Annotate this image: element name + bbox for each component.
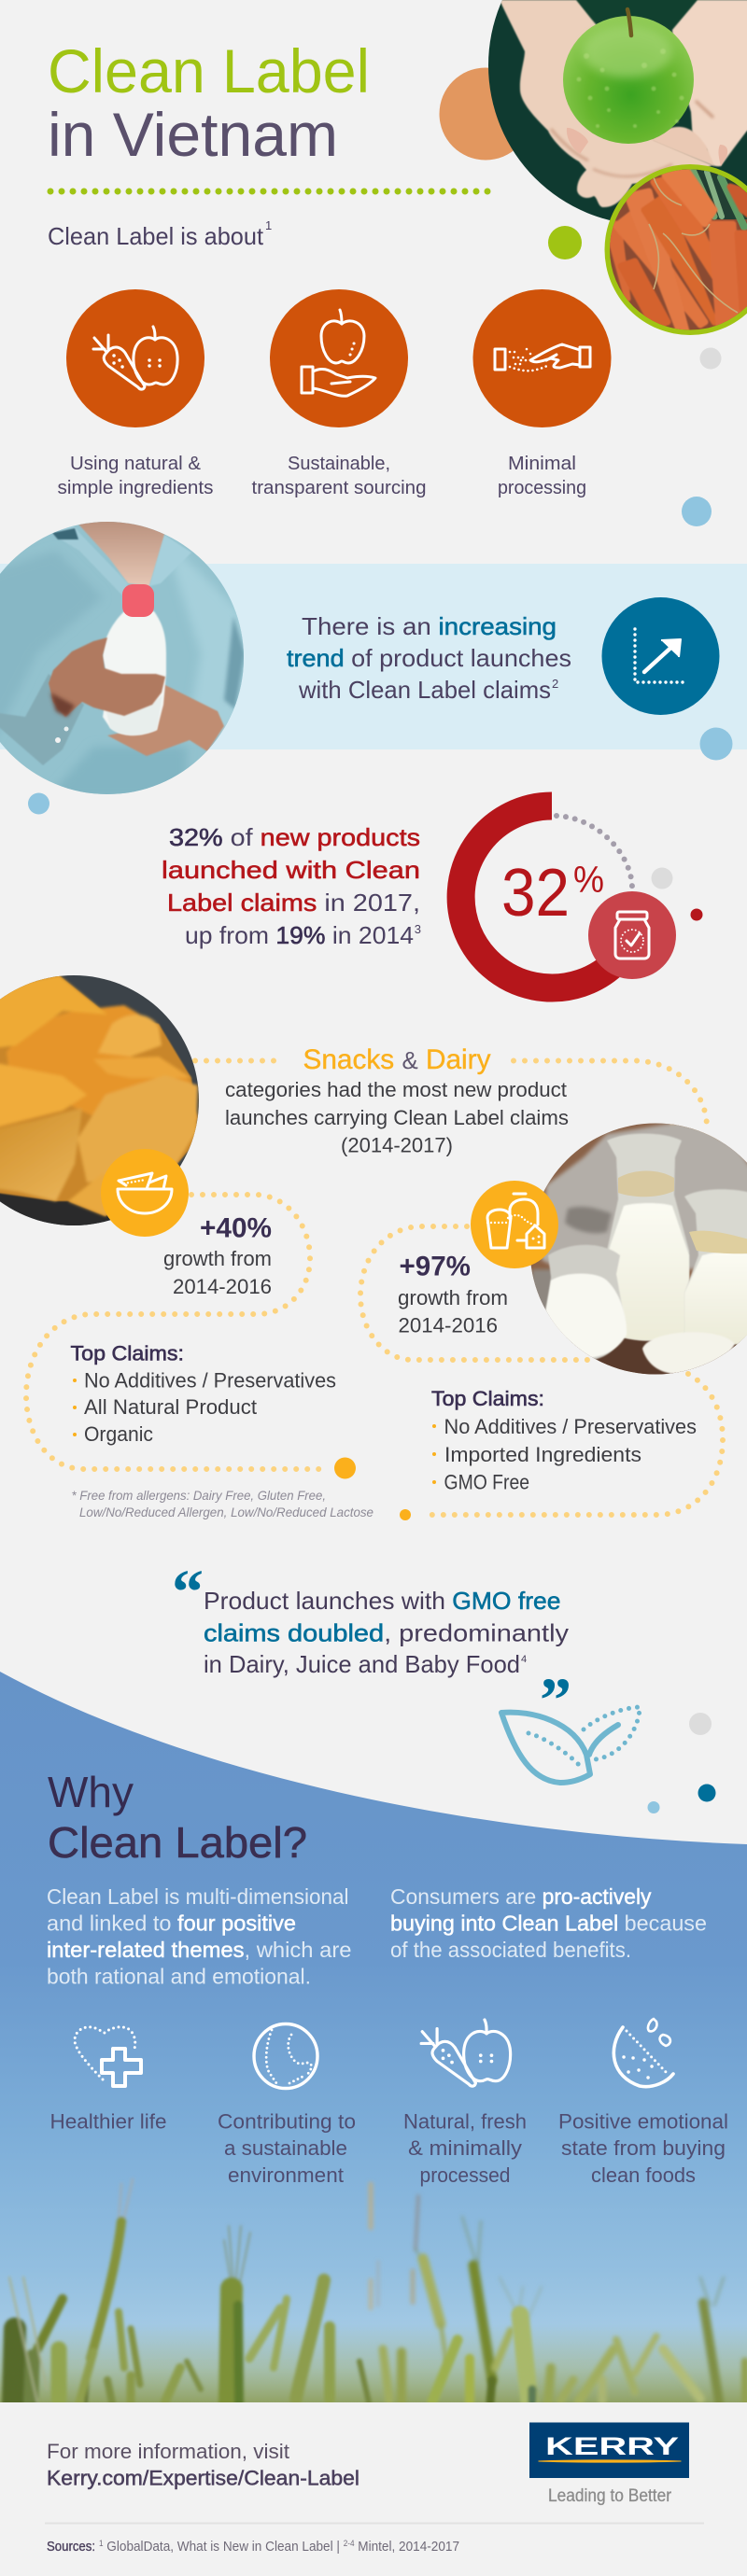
near ears left half: [9, 2179, 369, 2402]
bottle 2: [684, 1189, 747, 1344]
footer: more information: Kerry.com/Expertise/Clean-Label: [47, 2466, 359, 2490]
theme: natural and fresh: [403, 2020, 527, 2187]
theme: natural and fresh: processed: [420, 2163, 510, 2187]
text: 32% of new products: Label claims in 2017,: [167, 889, 420, 917]
panel: sky with wheat: [0, 1661, 747, 2402]
subheading: Clean Label is about: 1: [265, 218, 272, 232]
list: dairy top claims: Imported Ingredients: [444, 1443, 641, 1466]
dotted path: dairy route: [360, 1226, 723, 1515]
apple: [563, 9, 694, 144]
list: dairy top claims: No Additives / Preservatives: [444, 1415, 697, 1438]
icon: carrot and apple: [93, 327, 177, 389]
sleeve cuff: [0, 674, 84, 765]
panel: increasing trend band: [0, 564, 747, 760]
heading: Snacks & Dairy: Snacks & Dairy: [303, 1044, 491, 1075]
heading: Why Clean Label?: Clean Label?: [48, 1818, 307, 1867]
list: snacks top claims: Top Claims:: [71, 1342, 184, 1365]
title: in Vietnam: [48, 100, 338, 169]
photo: woman holding milk bottle: [0, 518, 247, 798]
text: increasing trend: 2: [552, 677, 558, 691]
pillar: sustainable sourcing: transparent sourcing: [252, 478, 426, 498]
list: dairy top claims: GMO Free: [444, 1471, 529, 1493]
heading: Snacks & Dairy: (2014-2017): [341, 1133, 453, 1157]
decorative dots: leaf: [648, 1713, 715, 1813]
quote: GMO free claims: “: [172, 1556, 204, 1627]
icon: hand with apple: [302, 310, 375, 396]
sources: 1: [99, 2539, 104, 2548]
pillar: natural ingredients: [58, 289, 213, 498]
photo: wheat field: [0, 2179, 747, 2402]
text: multi-dimensional: both rational and emotional.: [47, 1965, 311, 1989]
route end dots: [334, 1458, 411, 1520]
text: increasing trend: There is an increasing: [302, 612, 557, 640]
sources: Mintel, 2014-2017: [355, 2539, 459, 2555]
list: dairy top claims: Top Claims:: [431, 1387, 544, 1410]
icon: globe: [254, 2023, 317, 2089]
text: multi-dimensional: Clean Label is multi-dimensional: [47, 1884, 349, 1909]
pillar: natural ingredients: simple ingredients: [58, 478, 213, 498]
left hand: [500, 0, 712, 207]
bowl: [642, 1332, 735, 1374]
text: 32% of new products: [162, 823, 421, 949]
text: multi-dimensional: [47, 1884, 351, 1989]
photo: carrots: [605, 164, 747, 335]
heading: Snacks & Dairy: [225, 1044, 569, 1157]
theme: natural and fresh: Natural, fresh: [403, 2109, 527, 2134]
theme: natural and fresh: & minimally: [408, 2136, 522, 2160]
stat: +97%: [398, 1252, 508, 1337]
text: 32% of new products: 32% of new products: [169, 823, 420, 851]
theme: sustainable environment: a sustainable: [224, 2136, 347, 2160]
logo: Kerry: Leading to Better: [548, 2486, 672, 2506]
title: Clean Label: [48, 36, 370, 105]
icon: heart and cross: [75, 2027, 141, 2086]
icon: leaves: [501, 1707, 640, 1783]
text: increasing trend: [287, 612, 571, 704]
sources: 2-4: [344, 2539, 355, 2548]
quote: GMO free claims: Product launches with GMO free: [204, 1587, 560, 1615]
text: 32% of new products: launched with Clean: [162, 856, 420, 884]
pillar: sustainable sourcing: [252, 289, 426, 498]
pillar: minimal processing: Minimal: [508, 454, 576, 474]
icon: dairy products: [471, 1181, 558, 1268]
panel: four themes: [50, 2019, 728, 2187]
footer: more information: For more information, visit: [47, 2440, 289, 2463]
logo: Kerry: [529, 2423, 689, 2506]
left hand on bottle: [49, 637, 165, 717]
pillar: sustainable sourcing: Sustainable,: [288, 454, 390, 474]
theme: positive emotional state: [558, 2019, 728, 2187]
list: snacks top claims: Organic: [84, 1422, 153, 1446]
footnote: Low/No/Reduced Allergen, Low/No/Reduced Lactose: [79, 1505, 374, 1519]
logo: Kerry: KERRY: [545, 2432, 679, 2460]
stat: +97%: +97%: [400, 1252, 471, 1282]
stat: +40%: +40%: [200, 1213, 272, 1243]
text: 32% of new products: up from 19% in 2014: [185, 921, 414, 949]
footnote: * Free from allergens: Dairy Free, Gluten Free,: [71, 1488, 326, 1503]
theme: sustainable environment: Contributing to: [218, 2109, 356, 2134]
list: snacks top claims: No Additives / Preservatives: [84, 1368, 336, 1393]
quote: GMO free claims: in Dairy, Juice and Baby Food: [204, 1650, 520, 1678]
pillar: minimal processing: [472, 289, 611, 498]
icon: snack bowl: [101, 1149, 189, 1237]
theme: positive emotional state: Positive emotional: [558, 2109, 728, 2134]
quote: GMO free claims: [172, 1556, 571, 1735]
near ears right half: [432, 2315, 532, 2401]
bottle 1: [607, 1133, 689, 1340]
subheading: Clean Label is about: Clean Label is about: [48, 222, 264, 250]
theme: sustainable environment: [218, 2023, 356, 2187]
theme: positive emotional state: clean foods: [591, 2163, 696, 2187]
right hand: [672, 0, 747, 166]
icon: jar with check: [588, 891, 676, 979]
title: [48, 36, 370, 169]
footnote: [71, 1488, 374, 1519]
heading: Why Clean Label?: [48, 1768, 307, 1867]
icon: melon slice: [613, 2019, 673, 2087]
sources: [47, 2539, 459, 2555]
list: snacks top claims: [71, 1342, 336, 1446]
theme: healthier life: Healthier life: [50, 2109, 166, 2134]
photo: milk bottles: [523, 1120, 747, 1381]
jug: [546, 1245, 624, 1361]
theme: healthier life: [50, 2027, 166, 2134]
text: pro-actively buying: [390, 1884, 707, 1962]
pillar: minimal processing: processing: [498, 478, 586, 498]
stat: +97%: 2014-2016: [398, 1314, 498, 1337]
text: multi-dimensional: and linked to four positive: [47, 1911, 296, 1936]
stat: +97%: growth from: [398, 1286, 508, 1309]
list: dairy top claims: [431, 1387, 697, 1493]
text: pro-actively buying: Consumers are pro-actively: [390, 1884, 652, 1909]
photo: hands holding green apple: [486, 0, 747, 233]
bottle: [103, 611, 166, 735]
panel: dairy growth and claims: [398, 1252, 697, 1493]
theme: positive emotional state: state from buying: [561, 2136, 726, 2160]
panel: snacks growth and claims: [71, 1213, 336, 1446]
text: 32% of new products: 3: [415, 922, 421, 936]
dotted path: snacks route: [26, 1060, 707, 1469]
icon: two hands with dots: [495, 344, 590, 371]
decorative circle: orange: [439, 67, 532, 161]
text: pro-actively buying: buying into Clean Label because: [390, 1911, 707, 1936]
quote: GMO free claims: claims doubled , predominantly: [204, 1619, 569, 1647]
text: increasing trend: with Clean Label claims: [298, 676, 551, 704]
photo: potato chips: [0, 971, 205, 1232]
stat: +40%: 2014-2016: [173, 1275, 272, 1298]
mid ears right half: [383, 2259, 745, 2401]
panel: three pillars: [58, 289, 611, 498]
icon: carrot and apple: [421, 2020, 511, 2086]
icon: growth arrow: [601, 597, 719, 715]
sources: GlobalData, What is New in Clean Label |: [104, 2539, 344, 2555]
stat: +40%: growth from: [163, 1247, 272, 1270]
heading: Why Clean Label?: Why: [48, 1768, 134, 1816]
panel: 32 percent statistic: [162, 806, 702, 987]
footer: more information: [47, 2440, 359, 2490]
text: pro-actively buying: of the associated benefits.: [390, 1938, 631, 1962]
decorative dots: top right: [548, 226, 721, 526]
heading: Snacks & Dairy: categories had the most new product: [225, 1078, 567, 1101]
theme: sustainable environment: environment: [228, 2163, 344, 2187]
stat: +40%: [163, 1213, 272, 1298]
list: snacks top claims: All Natural Product: [84, 1395, 257, 1419]
distant soft stems: [371, 2184, 724, 2319]
chart: donut 32 percent: [461, 806, 676, 987]
quote: GMO free claims: ”: [540, 1664, 571, 1735]
text: multi-dimensional: inter-related themes , which are: [47, 1938, 351, 1962]
heading: Snacks & Dairy: launches carrying Clean Label claims: [225, 1106, 569, 1129]
neckline: [78, 522, 165, 586]
pillar: natural ingredients: Using natural &: [70, 454, 202, 474]
right hand: [107, 684, 224, 756]
quote: GMO free claims: 4: [521, 1654, 527, 1665]
text: increasing trend: trend of product launches: [287, 644, 571, 672]
chart: donut 32 percent: %: [573, 860, 604, 901]
chart: donut 32 percent: 32: [501, 856, 570, 931]
sources: Sources:: [47, 2539, 95, 2555]
